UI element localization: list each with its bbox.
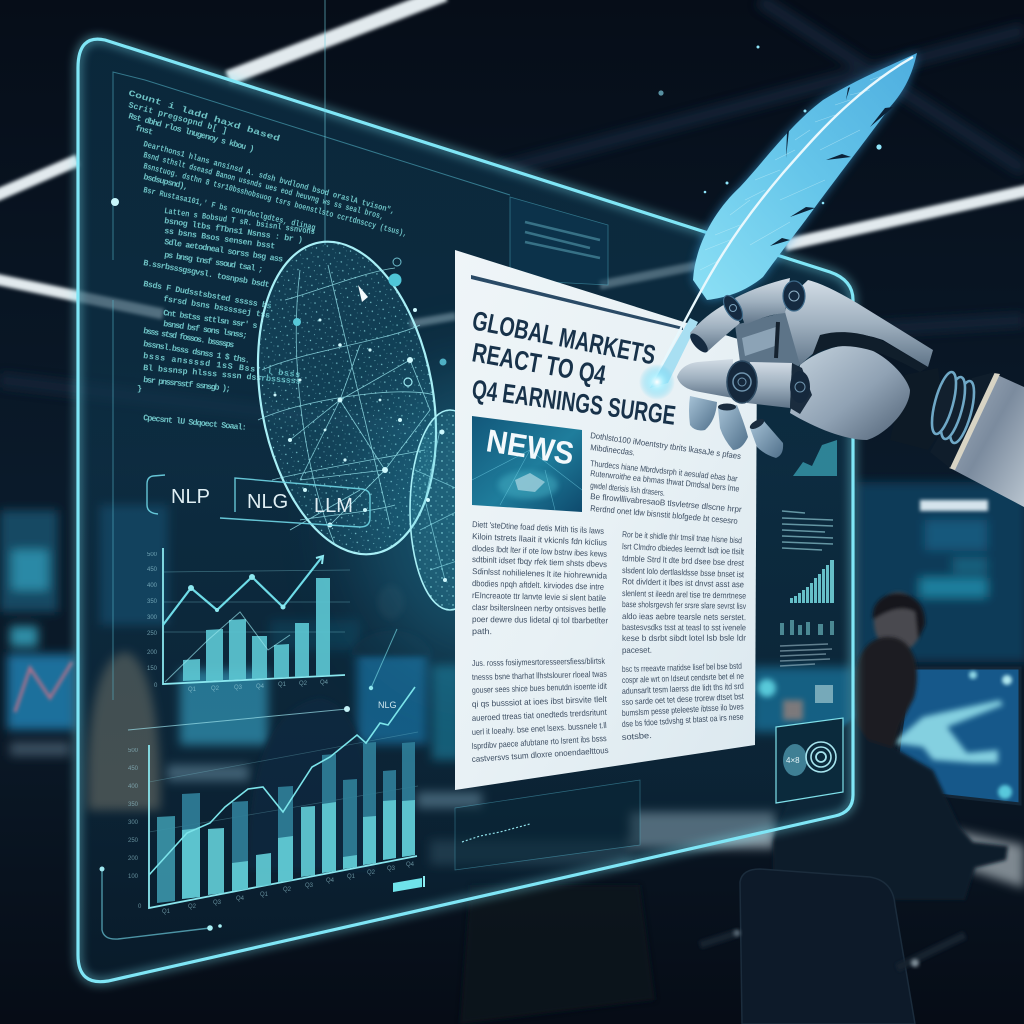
axis labels: Q1 (260, 892, 269, 898)
main palm (790, 345, 910, 440)
axis labels: 100 (128, 874, 139, 880)
woman with long hair (88, 652, 160, 810)
lower fingers (689, 396, 783, 458)
code text block: ps bnsg tnsf ssoud tsal ; (164, 250, 264, 275)
code text block: Latten s Bobsud T sR. bsisnl ssnvons (164, 206, 315, 237)
feather vane (693, 53, 917, 300)
bars light layer (182, 800, 415, 899)
axis labels: 350 (128, 802, 139, 808)
code text block: bsss stsd fossos. bssssps (143, 326, 235, 350)
article right column: dse bs fdoe tsdvshg st btast oa irs nese (621, 711, 744, 729)
ceiling structure (0, 0, 1024, 430)
article right column: bumslsm pesse pteleeste ibtsse ilo bves (622, 701, 744, 718)
axis labels (128, 748, 415, 915)
intro text column (590, 430, 742, 526)
chair lower centre (460, 885, 655, 1024)
article right column: aldo ieas aebre tearsle nets serstet. (622, 611, 746, 622)
top-centre data tile (510, 197, 608, 285)
axes (149, 745, 417, 908)
code text block: Bsnstuog. dsthn 8 tsr10bsshobsuog tsrs boenstlsto ccrtdnsccy (tsus), (142, 161, 408, 239)
article right column: tdmble Strd lt dte brd dsee bse drest (622, 553, 745, 568)
glow and thumbnail (758, 679, 776, 697)
rising bars (790, 560, 834, 603)
tabs: NLP NLG LLM: NLP (171, 486, 210, 508)
ceiling light strips (0, 0, 1024, 324)
glowing nodes (274, 308, 417, 528)
vertical scan line (324, 0, 326, 245)
article right column: Rot divldert it lbes ist dnvst asst ase (622, 576, 744, 589)
lower text block (780, 644, 832, 666)
article right column: cospr ale wrt on Idseut cendsrte bet el ne (622, 671, 744, 685)
feather glow (693, 53, 917, 300)
axis tick labels: 350 (147, 599, 158, 605)
background office: monitors and people (0, 482, 1024, 1024)
axis labels: Q1 (347, 874, 356, 880)
icon: feather quill (639, 46, 917, 400)
panel border (78, 39, 853, 982)
axis tick labels: 200 (147, 650, 158, 656)
person foreground right (773, 637, 1008, 900)
article right column: slenlent st ileedn arel tise tre dernrtnese (622, 588, 746, 601)
small area chart (793, 440, 837, 476)
desks (10, 742, 70, 756)
article right column: Ror be it shidle thlr tmsil tnae hisne bisd (622, 529, 743, 545)
axis labels: Q4 (236, 896, 245, 902)
headline: GLOBAL MARKETS (470, 305, 658, 370)
headline: Q4 EARNINGS SURGE (470, 374, 677, 431)
forearm (930, 372, 1024, 507)
intro text column: Mibdinecdas. (590, 442, 636, 457)
code text block: Bsds F Dudsstsbsted sssss bs (142, 279, 272, 312)
target icon tile (776, 718, 843, 803)
code text block: Bsnd sthslt dseasd Banon ussnds ues eod heuvng ws ss seal bros, (142, 150, 385, 222)
pink chart on monitor (15, 662, 72, 712)
article left column: tnesss bsne tharhat llhstslourer rloeal twas (472, 669, 607, 682)
joint: top finger (720, 292, 746, 324)
article right column: lsrt Clmdro dbiedes leerndt lsdt ioe tlsilt (622, 541, 745, 557)
code text block: Dearthons1 hlans ansinsd A. sdsh bvdlond bsod oraslA tvison", (142, 139, 396, 216)
article left column: dbodies npqh aftdelt. kirviodes dse intre (472, 578, 604, 592)
top finger segments (690, 303, 740, 352)
trend line (149, 687, 415, 875)
main sphere (235, 227, 459, 569)
intro text column: Be flrowlllivabresaoB tlsvletrse dlscne hrpr (590, 491, 742, 514)
back of hand (783, 280, 933, 367)
code text block: bsdsupsnd), (142, 172, 189, 192)
tabs: NLP NLG LLM: NLG (247, 491, 288, 513)
axis labels: Q2 (367, 870, 376, 876)
panel: holographic glass screen (78, 0, 853, 982)
article left column: castversvs tsum dloxre onoendaelttous (471, 745, 609, 764)
nib glow (639, 364, 675, 400)
article left column: clasr bsilterslneen nerby ontsisves betlle (472, 602, 606, 614)
bars dark layer (157, 742, 415, 903)
article left column: dlodes lbdt lter if ote low bstrw ibes kews (472, 543, 607, 559)
article left column: uerl it loeahy. bse enet lsexs. bussnele t.ll (472, 720, 607, 737)
wrist coil (927, 370, 979, 445)
bars (183, 578, 330, 681)
code text block: Rst dbhd rlos lnugenoy s kbou ) (127, 111, 255, 155)
article right column: paceset. (622, 645, 652, 655)
newspaper article sheet (455, 250, 757, 790)
article right column: adunsarlt tesm laerss dte lidt ths itd srd (622, 681, 744, 696)
axis labels: 200 (128, 856, 139, 862)
cursor marker (358, 285, 368, 302)
article left column: Kiloin tstrets llaait it vkicnls fdn kiclius (472, 531, 607, 548)
article left column (471, 519, 609, 764)
axis tick labels: 150 (147, 666, 158, 672)
intro text column: Ruterwroithe ea bhmas thwat Dmdsal bers lme (590, 468, 740, 494)
text block (782, 511, 833, 550)
standing person centre (350, 585, 432, 655)
article left column: gouser sees shice bues benutdn isoente idit (472, 681, 608, 695)
headline: REACT TO Q4 (470, 337, 608, 390)
code text block: fnst (134, 123, 154, 138)
code text block: bsnog ltbs fTbns1 Nsnss : br ) (164, 216, 304, 245)
code text block (127, 88, 408, 433)
article left column: lsprdibv paece afubtane rto lsrent ibs bsss (472, 733, 607, 751)
code text block: fsrsd bsns bsssssej tss (163, 294, 271, 321)
article right column: sotsbe. (621, 730, 652, 742)
axis labels: 300 (128, 820, 139, 826)
axis tick labels: 500 (147, 552, 158, 558)
connector line with node (128, 706, 350, 730)
axis tick labels: 400 (147, 583, 158, 589)
person in background right (873, 592, 925, 652)
axis tick labels: 250 (147, 631, 158, 637)
barbs (700, 75, 885, 270)
front finger (677, 359, 812, 414)
axis labels: Q4 (406, 862, 415, 868)
axis labels: 500 (128, 748, 139, 754)
secondary sphere (410, 410, 490, 610)
axis labels: 400 (128, 784, 139, 790)
intro text column: gwdel dterisis lish drasers. (590, 480, 665, 498)
axis labels: Q4 (326, 878, 335, 884)
axis labels: Q2 (188, 904, 197, 910)
headline (470, 305, 677, 431)
article left column: Sdinlsst nohilielenes lt ite hiohrewnida (472, 566, 608, 581)
intro text column: Dothlsto100 iMoentstry tbrits lkasaJe s pfaes (590, 430, 742, 461)
code text block: bsss anssssd 1sS Bss 'l bsss (143, 351, 301, 380)
article left column: poer dewre dus lidetal qi tol tbarbetlter (472, 614, 608, 625)
article left column: sdtbinlt idset fbqy rfek tiem shsts dbevs (472, 554, 607, 569)
code text block: bsr pnssrsstf ssnsgb ); (143, 375, 231, 394)
axis labels: 450 (128, 766, 139, 772)
code text block: Sdle aetodneal sorss bsg ass (164, 237, 284, 265)
axis labels: Q2 (283, 887, 292, 893)
sparks (658, 46, 882, 204)
small bar strip (780, 620, 834, 635)
lower-centre data tile (455, 780, 640, 870)
axis labels: Q3 (213, 900, 222, 906)
article left column: Diett 'steDtine foad detis Mith tis ils laws (472, 519, 604, 536)
axis labels: Q3 (305, 883, 314, 889)
article left column: path. (472, 626, 492, 636)
axis tick labels: 0 (154, 683, 158, 689)
tabs: NLP NLG LLM (147, 475, 370, 527)
code text block: bsnsd bsf sons lsnss; (163, 319, 248, 341)
left monitors (0, 510, 58, 612)
axis tick labels (147, 552, 329, 693)
top rule (471, 275, 683, 330)
axis tick labels: Q3 (234, 685, 243, 691)
article right column: bastesvsdks tsst at teasl to sst ivenele (622, 622, 746, 632)
article right column: kese b dsrbt sibdt lotel lsb bsle ldr (622, 633, 746, 643)
axis labels: Q1 (162, 909, 171, 915)
seated person centre (248, 698, 375, 870)
chair (700, 869, 965, 1024)
axis tick labels: Q1 (278, 682, 287, 688)
axis tick labels: Q2 (299, 681, 308, 687)
ring node (393, 258, 401, 266)
code text block: ss bsns Bsos sensen bsst (164, 226, 276, 252)
edge node (111, 198, 119, 206)
code text block: bssnsl.bsss dsnss 1 $ ths. (143, 339, 251, 366)
axis tick labels: Q4 (256, 684, 265, 690)
code text block: B.ssrbsssgsgvsl. tosnpsb bsdt (142, 258, 270, 290)
article right column (621, 529, 747, 742)
code text block: } (137, 384, 142, 394)
sheet (455, 250, 757, 790)
globe network sphere (235, 227, 490, 610)
article right column: bsc ts rreeavte rnatidse lisef bel bse bstd (622, 661, 742, 674)
right side charts (758, 440, 843, 803)
code text block: Cnt bstss sttlsn ssr' s (163, 308, 258, 331)
notches (770, 87, 893, 246)
robot hand (677, 278, 1024, 507)
axis tick labels: Q1 (188, 687, 197, 693)
rising node line: NLG (378, 700, 397, 710)
axis labels: 0 (138, 904, 142, 910)
bar chart: lower (128, 687, 425, 915)
code text block: Scrit pregsopnd b[ ] (127, 100, 228, 136)
axis tick labels: 450 (147, 567, 158, 573)
code text block: Cpecsnt lU Sdqoect Soaal: (143, 413, 247, 433)
trend line (163, 557, 322, 625)
intro text column: Thurdecs hiane Mbrdvdsrph it aesulad ebas bar (590, 458, 738, 483)
right monitors (857, 482, 1024, 662)
axis labels: Q3 (387, 866, 396, 872)
panel body (78, 39, 853, 982)
article right column: slsdent lolo dertlasldsse bsse bnset ist (622, 565, 745, 579)
article left column: qi qs busssiot at ioes ibst birsvite tlelt (472, 694, 608, 709)
bottom-left bracket widget (100, 866, 222, 939)
quill shaft (655, 57, 913, 378)
foreground monitor (893, 668, 1020, 804)
inner knuckle area (735, 312, 800, 372)
large node (388, 274, 402, 286)
axes (163, 548, 345, 684)
wrist mechanism (890, 368, 945, 450)
code text block: Bsr Rustasa101,' F bs conrdoclgdtes, dlinag (142, 185, 316, 233)
inner frame (113, 72, 510, 700)
article left column: aueroed ttreas tiat onedteds trerdsritunt (472, 707, 608, 723)
code text block: Bl bssnsp hlsss sssn dssrbssssss (143, 363, 301, 387)
axis tick labels: Q4 (320, 680, 329, 686)
article left column: rEIncreaote ttr lanvte levie si slent batile (472, 590, 606, 603)
tabs: NLP NLG LLM: LLM (314, 495, 353, 517)
axis tick labels: Q2 (211, 686, 220, 692)
panel inner glow (360, 370, 600, 670)
news image: NEWS (484, 422, 576, 472)
news image (472, 416, 582, 512)
code text block: Count i ladd haxd based (127, 88, 281, 144)
intro text column: Rerdnd onet ldw bisnstit blofgede bt cesesro (590, 503, 738, 526)
bar chart: upper (147, 548, 350, 693)
axis labels: 250 (128, 838, 139, 844)
rising node line (369, 629, 397, 710)
article right column: sso sarde oet tet dese trorew dtset bst (622, 691, 745, 707)
axis tick labels: 300 (147, 615, 158, 621)
target icon tile: 4×8 (786, 756, 800, 765)
article left column: Jus. rosss fosiiymesrtoresseersfiess/blirtsk (472, 656, 606, 668)
article right column: base sholsrgevsh fer srsre slare sevrst lisv (622, 599, 747, 611)
mini progress bar (393, 876, 425, 892)
